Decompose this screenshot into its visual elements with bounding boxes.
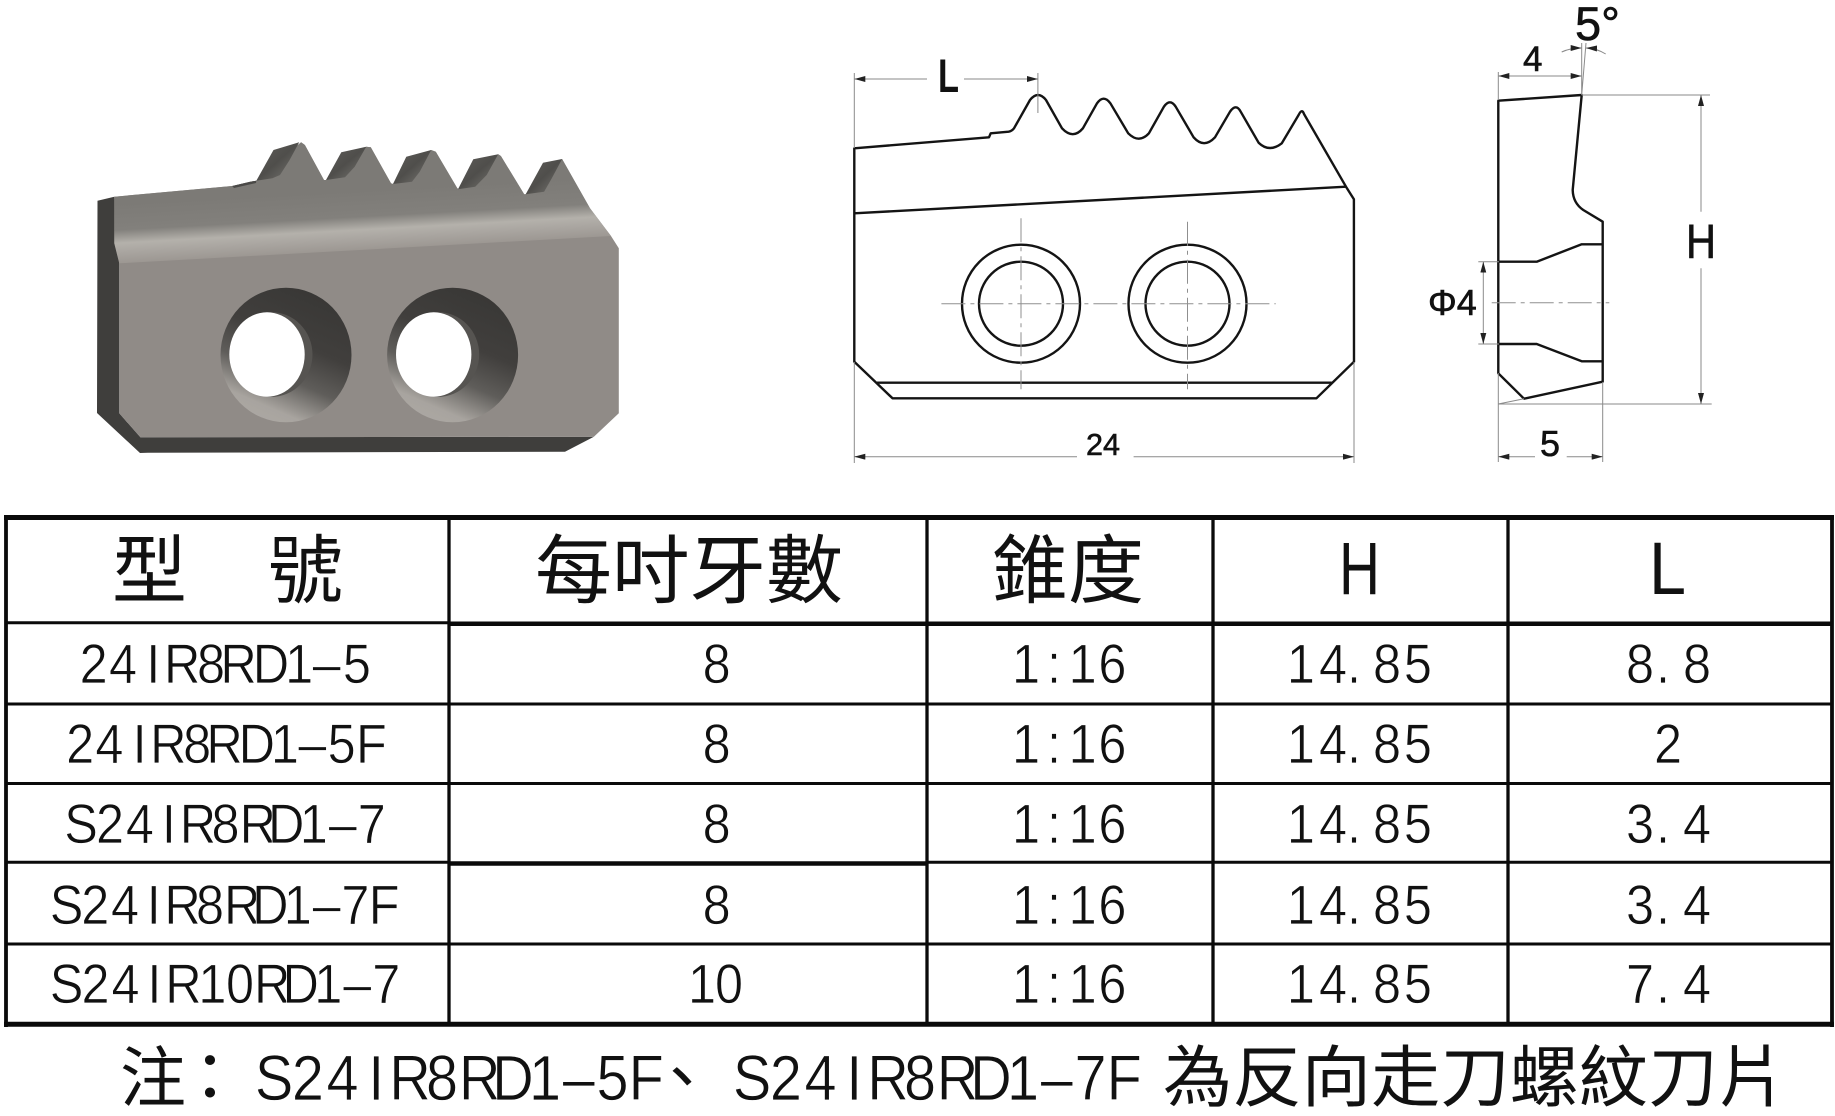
row 24IR8RD1-5F: 1:16 xyxy=(1012,714,1126,776)
tooth flanks xyxy=(256,142,562,194)
row S24IR8RD1-7: 8 xyxy=(703,794,731,856)
table header: H xyxy=(1339,527,1380,610)
row S24IR10RD1-7 xyxy=(50,954,1711,1016)
row S24IR10RD1-7: S24IR10RD1–7 xyxy=(50,954,400,1016)
row 24IR8RD1-5F: 2 xyxy=(1654,714,1682,776)
row S24IR8RD1-7F: 3.4 xyxy=(1626,875,1711,937)
dimension 4 xyxy=(1498,40,1582,100)
row S24IR8RD1-7F: 14.85 xyxy=(1287,875,1432,937)
side view technical drawing xyxy=(1428,0,1716,464)
row S24IR8RD1-7: 1:16 xyxy=(1012,794,1126,856)
row 24IR8RD1-5F: 14.85 xyxy=(1287,714,1432,776)
footnote xyxy=(120,1041,1787,1116)
shoulder step xyxy=(232,181,256,188)
row S24IR8RD1-7F: S24IR8RD1–7F xyxy=(50,875,400,937)
row S24IR8RD1-7F xyxy=(50,875,1711,937)
row S24IR8RD1-7: S24IR8RD1–7 xyxy=(64,794,386,856)
row S24IR10RD1-7: 7.4 xyxy=(1626,954,1711,1016)
3D render: threading insert xyxy=(97,142,619,453)
row 24IR8RD1-5F xyxy=(66,714,1682,776)
table header: L xyxy=(1649,527,1686,610)
footnote: ： xyxy=(177,1041,243,1115)
row S24IR10RD1-7: 14.85 xyxy=(1287,954,1432,1016)
upper sloped face with highlight band xyxy=(114,142,611,263)
table header xyxy=(112,527,1686,613)
dimension H: H xyxy=(1686,216,1716,269)
row 24IR8RD1-5F: 24IR8RD1–5F xyxy=(66,714,387,776)
footnote: 注 xyxy=(120,1041,186,1115)
bottom chamfer line xyxy=(877,382,1332,384)
row S24IR8RD1-7: 14.85 xyxy=(1287,794,1432,856)
main face xyxy=(114,142,619,437)
row 24IR8RD1-5 xyxy=(80,634,1711,696)
row 24IR8RD1-5F: 8 xyxy=(703,714,731,776)
row 24IR8RD1-5: 1:16 xyxy=(1012,634,1126,696)
dimension hole diameter xyxy=(1428,262,1499,344)
hole centre line xyxy=(1492,302,1609,304)
row S24IR10RD1-7: 10 xyxy=(688,954,743,1016)
dark side and bottom faces xyxy=(97,197,594,453)
dimension H xyxy=(1498,95,1716,404)
footnote: S24IR8RD1–5F xyxy=(255,1042,664,1114)
dimension 5: 5 xyxy=(1540,423,1560,464)
dimension L: L xyxy=(938,49,959,102)
row 24IR8RD1-5: 14.85 xyxy=(1287,634,1432,696)
dimension 4: 4 xyxy=(1523,40,1542,79)
mounting holes xyxy=(962,245,1246,363)
countersunk hole right xyxy=(387,288,518,422)
dimension 24 xyxy=(854,362,1354,463)
side outline xyxy=(1498,95,1603,399)
row S24IR10RD1-7: 1:16 xyxy=(1012,954,1126,1016)
rake edge line xyxy=(854,187,1346,213)
dimension hole diameter: Φ4 xyxy=(1428,282,1477,323)
footnote: 、 xyxy=(649,1041,715,1115)
specification table xyxy=(4,515,1834,1027)
table header: 每吋牙數 xyxy=(535,529,843,613)
row 24IR8RD1-5: 8.8 xyxy=(1626,634,1711,696)
footnote: 為反向走刀螺紋刀片 xyxy=(1163,1041,1787,1116)
table header: 錐度 xyxy=(992,529,1144,613)
footnote: S24IR8RD1–7F xyxy=(733,1042,1142,1114)
table header: 型 xyxy=(112,529,187,613)
dimension L xyxy=(854,49,1038,148)
dimension 5 xyxy=(1498,373,1603,464)
row 24IR8RD1-5: 24IR8RD1–5 xyxy=(80,634,371,696)
hole profile xyxy=(1499,244,1603,361)
row S24IR8RD1-7: 3.4 xyxy=(1626,794,1711,856)
insert outline xyxy=(854,95,1354,398)
dimension 24: 24 xyxy=(1086,427,1120,462)
centre lines xyxy=(941,218,1276,389)
row S24IR8RD1-7F: 1:16 xyxy=(1012,875,1126,937)
table header: 號 xyxy=(268,529,343,613)
row 24IR8RD1-5: 8 xyxy=(703,634,731,696)
dimension 5 degree angle xyxy=(1562,0,1620,95)
table grid xyxy=(4,515,1834,1027)
front view technical drawing xyxy=(854,49,1354,463)
countersunk hole left xyxy=(220,288,352,422)
row S24IR8RD1-7F: 8 xyxy=(703,875,731,937)
row S24IR8RD1-7 xyxy=(64,794,1711,856)
